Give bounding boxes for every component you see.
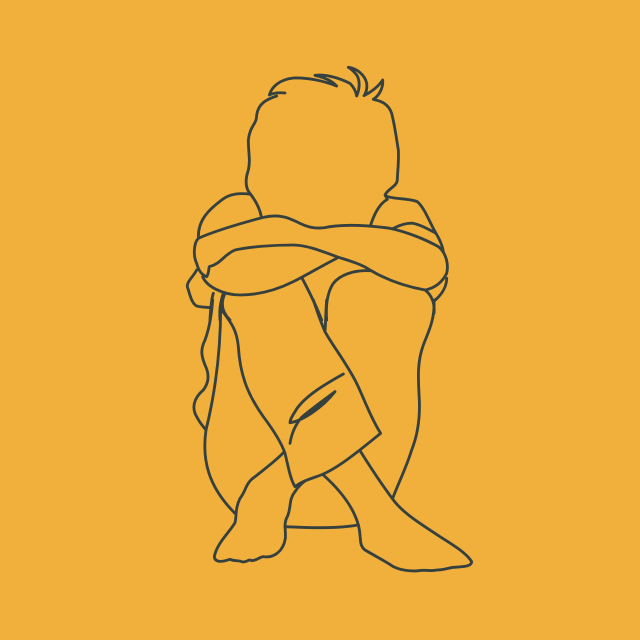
ground line bbox=[285, 525, 358, 528]
shoulders bbox=[198, 194, 443, 252]
sleeve edges and knee bbox=[187, 270, 447, 320]
dress fold bbox=[290, 374, 343, 443]
crossed arms bbox=[194, 216, 447, 295]
head and hair bbox=[246, 67, 398, 225]
left side of body bbox=[194, 300, 235, 513]
upper body: head, shoulders and arms bbox=[187, 67, 447, 320]
left foot bbox=[214, 453, 305, 562]
right leg bbox=[393, 300, 434, 498]
right foot bbox=[323, 451, 472, 571]
lower body: legs, dress and feet bbox=[194, 300, 472, 571]
dress bbox=[222, 300, 381, 487]
